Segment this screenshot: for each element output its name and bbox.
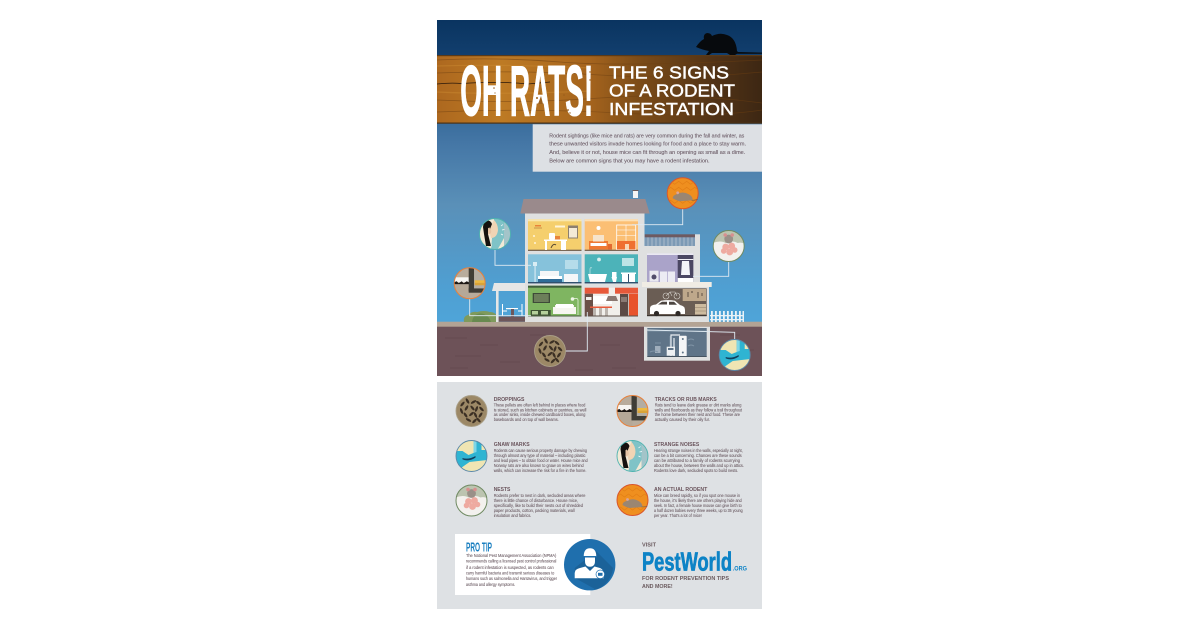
sign: an actual rodent: a half dozen babies every three weeks, up to 35 young [654,508,743,513]
sign: nests: specifically, like to build their nests out of shredded [494,503,584,508]
callout: pro tip: The National Pest Management Association (NPMA) [466,553,557,558]
room: yellow bedroom study [528,219,582,251]
sign: nests: there is little chance of disturbance. House mice, [494,498,578,503]
sign: strange noises: STRANGE NOISES [654,442,700,448]
room: orange bedroom [585,219,638,251]
sign: nests: NESTS [494,487,511,493]
sign: strange noises: about the house, between the walls and up in attics. [654,463,744,468]
room: purple laundry [647,253,693,283]
icon: nest callout [713,230,745,262]
logo: visit PestWorld.org: .ORG [733,566,747,573]
title: OH RATS! [460,52,593,132]
sign: gnaw marks: walls, which can increase the risk for a fire in the home. [494,468,586,473]
sign: an actual rodent: seek. In fact, a female house mouse can give birth to [654,503,742,508]
sign: strange noises: Hearing strange noises in the walls, especially at night, [654,448,743,453]
sign: droppings: These pellets are often left behind in places where food [494,402,586,408]
infographic [437,20,762,609]
sign: tracks or rub marks: Rats tend to leave dark grease or dirt marks along [655,402,742,408]
ground: soil and pavement [437,322,762,376]
sign: nests: insulation and fabrics. [494,513,531,518]
sign: tracks or rub marks [616,395,743,427]
callout: pro tip: PRO TIP [466,540,492,555]
panel: intro text [533,124,762,172]
roof [520,199,650,214]
banner: wooden plank title: OH RATS! [460,52,593,132]
sign: an actual rodent: per year. That's a lot of mice! [654,513,702,518]
chimney [632,190,638,198]
logo: visit PestWorld.org [642,543,747,590]
subtitle: the 6 signs of a rodent infestation: OF A RODENT [609,81,735,101]
sign: an actual rodent: Mice can breed rapidly, so if you spot one mouse in [654,493,741,498]
callout: pro tip: carry harmful bacteria and transmit serious diseases to [466,570,555,576]
room: green living room [528,286,582,316]
house body [525,213,709,322]
sign: droppings: DROPPINGS [494,397,525,403]
panel: intro text: Below are common signs that you may have a rodent infestation. [549,158,710,164]
icon: pest professional badge [564,539,615,590]
sign: tracks or rub marks: TRACKS OR RUB MARKS [655,397,717,403]
room: red kitchen [585,288,638,316]
callout: pro tip: asthma and allergy symptoms. [466,582,515,587]
sign: gnaw marks: Norway rats are also known to gnaw on wires behind [494,463,584,468]
porch [492,283,527,322]
connector lines [470,208,735,351]
subtitle: the 6 signs of a rodent infestation: THE 6 SIGNS [609,62,729,82]
logo: visit PestWorld.org: FOR RODENT PREVENTION TIPS [642,576,729,582]
panel: intro text: And, believe it or not, house mice can fit through an opening as small as a dime. [549,150,745,156]
logo: visit PestWorld.org: VISIT [642,543,656,549]
basement [644,327,710,361]
sign: tracks or rub marks: walls and floorboards as they follow a trail throughout [655,407,743,412]
sign: droppings: is stored, such as kitchen cabinets or pantries, as well [494,407,586,412]
callout: pro tip: if a rodent infestation is suspected, as rodents can [466,565,554,570]
sign: droppings: baseboards and on top of wall beams. [494,417,559,422]
panel: intro text: these unwanted visitors invade homes looking for food and a place to stay warm. [549,142,746,148]
sign: gnaw marks: GNAW MARKS [494,442,530,448]
icon: tracks callout [454,267,486,299]
sign: gnaw marks: and lead pipes – to obtain food or water. House mice and [494,458,588,463]
callout: pro tip: humans such as salmonella and Hantavirus, and trigger [466,576,557,581]
sign: strange noises: Rodents love dark, secluded spots to build nests. [654,468,738,473]
sign: nests [456,484,586,518]
icon: droppings callout [534,336,566,366]
icon: gnaw marks callout [719,339,751,371]
logo: visit PestWorld.org: PestWorld [642,547,732,577]
icon: white car [650,300,685,316]
sign: an actual rodent: the house, it's likely there are others playing hide and [654,498,742,503]
sign: tracks or rub marks: actually caused by their oily fur. [655,417,710,422]
fence [710,311,744,322]
sign: strange noises [616,440,744,473]
sign: gnaw marks: through almost any type of material – including plastic [494,453,586,458]
room: teal bathroom [585,254,638,283]
subtitle: the 6 signs of a rodent infestation: INFESTATION [609,99,734,119]
icon: rat silhouette on the banner [696,33,762,55]
panel: signs list [437,382,762,609]
sign: tracks or rub marks: the home between their nest and food. These are [655,412,741,417]
bush [464,311,499,322]
sign: droppings: as under sinks, inside chewed cardboard boxes, along [494,412,586,417]
logo: visit PestWorld.org: AND MORE! [642,584,673,590]
sign: nests: paper products, cotton, packing materials, wall [494,508,575,513]
garage [642,282,712,316]
callout: pro tip [455,534,590,595]
sign: gnaw marks: Rodents can cause serious property damage by chewing [494,448,588,453]
panel: intro text: Rodent sightings (like mice and rats) are very common during the fall and winter, as [549,134,745,140]
sign: strange noises: can be a bit concerning. Chances are these sounds [654,453,742,458]
sign: an actual rodent: AN ACTUAL RODENT [654,487,708,493]
room: blue bedroom [528,254,582,283]
balcony [645,234,695,246]
sign: an actual rodent [616,484,743,518]
icon: actual rodent callout [667,178,699,209]
icon: strange noises callout [479,218,511,250]
sign: strange noises: can be attributed to a family of rodents scurrying [654,458,741,463]
sign: gnaw marks [456,440,588,473]
subtitle: the 6 signs of a rodent infestation [609,62,735,119]
sky background [437,20,762,376]
sign: nests: Rodents prefer to nest in dark, secluded areas where [494,493,586,498]
sign: droppings [456,396,586,426]
callout: pro tip: recommends calling a licensed pest control professional [466,559,556,564]
